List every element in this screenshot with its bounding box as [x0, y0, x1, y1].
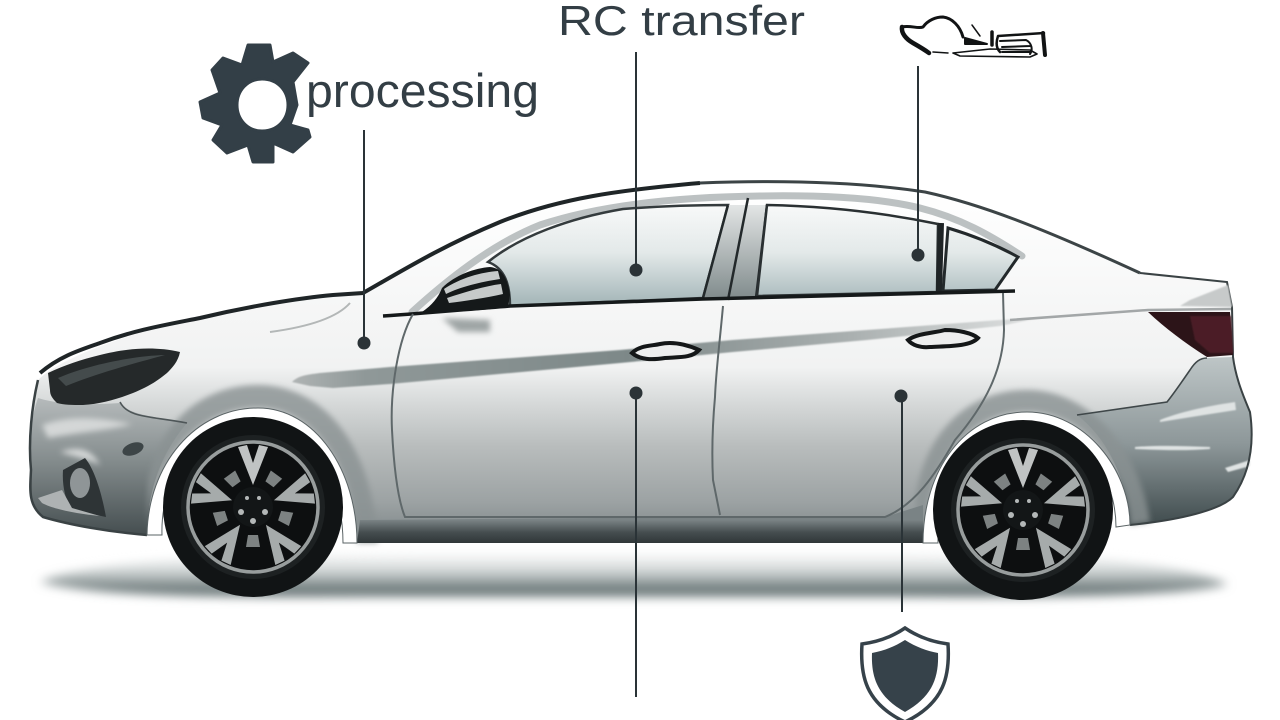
lower lip highlight — [38, 490, 100, 516]
deck seam — [1010, 309, 1231, 320]
mirror shadow — [442, 318, 490, 332]
roof and hood outline — [40, 183, 700, 373]
rear window — [757, 205, 938, 296]
quarter window — [943, 228, 1018, 291]
door pillar — [703, 198, 768, 300]
tail light — [1148, 312, 1233, 357]
front wheel arch — [147, 408, 357, 543]
window belt line — [383, 291, 1015, 316]
leader: sketch icon — [912, 66, 924, 262]
headlight — [48, 349, 180, 405]
window trim band — [412, 196, 1022, 312]
icon: sketch machine — [902, 17, 1045, 57]
front wheel — [163, 417, 343, 597]
door handle: rear — [908, 330, 978, 347]
rear wheel arch — [923, 412, 1130, 543]
rear bumper seam — [1077, 358, 1207, 415]
fender seam — [120, 402, 187, 423]
rear wheel — [933, 420, 1113, 600]
fog lamp — [63, 458, 106, 517]
car body — [30, 182, 1252, 543]
leader: RC transfer — [630, 52, 642, 276]
car illustration — [30, 182, 1252, 600]
leader: lower centre — [630, 386, 642, 697]
label: processing: processing — [306, 64, 539, 117]
rear bumper highlights — [1135, 402, 1250, 472]
wheel arch shading — [147, 385, 1150, 543]
roof rear outline — [700, 182, 1140, 273]
door seams — [392, 293, 1004, 517]
door handle: front — [632, 343, 699, 359]
sill — [357, 505, 923, 543]
rear deck outline — [1130, 273, 1252, 525]
leader: shield — [894, 390, 908, 612]
hood crease — [270, 303, 350, 332]
front window — [488, 205, 728, 306]
rear bumper shading — [1077, 357, 1252, 525]
front outline — [30, 380, 147, 535]
leader: processing — [358, 130, 370, 350]
body side stripe — [292, 318, 1040, 388]
trunk highlight — [1180, 285, 1232, 307]
front bumper shading — [30, 398, 187, 535]
ground shadow — [40, 552, 1228, 597]
side marker — [121, 440, 145, 458]
icon: gear — [200, 45, 310, 162]
icon: shield — [862, 628, 948, 720]
front bumper highlights — [42, 418, 132, 465]
side mirror — [422, 267, 510, 312]
rear window divider — [939, 223, 941, 292]
